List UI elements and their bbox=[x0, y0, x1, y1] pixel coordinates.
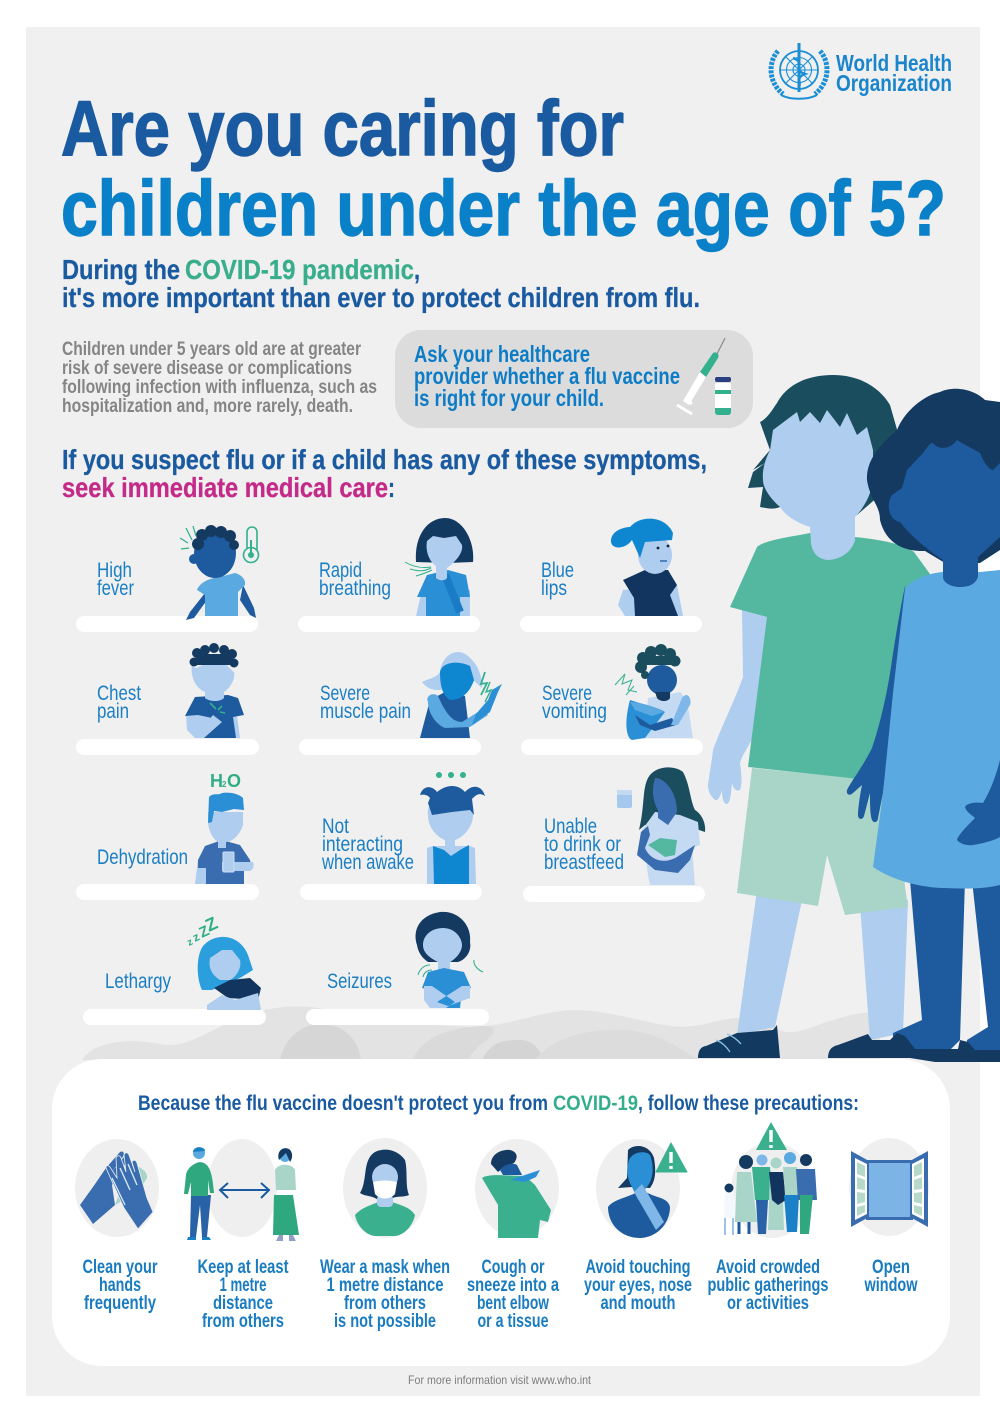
precaution: keep distance: 1 metre bbox=[220, 1275, 266, 1296]
heading: seek medical care: : bbox=[388, 472, 395, 503]
legs bbox=[893, 880, 965, 1050]
back hair bbox=[867, 389, 1000, 563]
WHO logo: Organization bbox=[836, 70, 952, 96]
symptom: chest pain bbox=[76, 643, 259, 755]
right hand bbox=[957, 760, 1000, 845]
dress bbox=[873, 570, 1000, 889]
precaution: wear a mask: is not possible bbox=[334, 1311, 436, 1332]
precaution: avoid crowds: Avoid crowded bbox=[716, 1257, 820, 1278]
icon: H2O text: 2 bbox=[222, 780, 227, 789]
precaution: open window bbox=[849, 1138, 929, 1296]
symptom: not interacting when awake: interacting bbox=[322, 833, 403, 856]
left arm bbox=[847, 586, 908, 822]
precaution: cough into elbow: or a tissue bbox=[478, 1311, 548, 1332]
icon: crowd with warning bbox=[724, 1122, 817, 1238]
legs bbox=[737, 890, 802, 1035]
person 3 bbox=[752, 1167, 772, 1200]
symptom: unable to drink or breastfeed: Unable bbox=[544, 815, 597, 838]
icon: zzz: z bbox=[186, 937, 195, 949]
symptom: seizures bbox=[306, 912, 489, 1025]
precaution: open window: window bbox=[864, 1275, 918, 1296]
symptom: blue lips: lips bbox=[541, 577, 567, 600]
person 4 bbox=[768, 1172, 784, 1230]
symptom: dehydration bbox=[76, 771, 259, 900]
icon: child with water glass bbox=[195, 771, 254, 884]
face and neck bbox=[889, 440, 1000, 587]
callout: ask your healthcare provider: is right for your child. bbox=[414, 385, 604, 411]
icon: open window bbox=[849, 1138, 929, 1236]
symptom: severe vomiting: vomiting bbox=[542, 700, 607, 723]
symptom: severe muscle pain bbox=[299, 652, 502, 755]
precaution: clean your hands: hands bbox=[99, 1275, 141, 1296]
hair bbox=[748, 375, 900, 515]
text block: risk explanation bbox=[62, 339, 377, 417]
precaution: cough into elbow: Cough or bbox=[482, 1257, 545, 1278]
WHO logo bbox=[771, 43, 952, 99]
symptom: rapid breathing bbox=[298, 518, 480, 632]
symptom: unable to drink or breastfeed: breastfeed bbox=[544, 851, 624, 874]
icon: child with muscle pain bbox=[420, 652, 502, 738]
person 5 bbox=[783, 1167, 799, 1195]
symptom: severe vomiting bbox=[521, 644, 703, 755]
heading: seek medical care bbox=[62, 444, 707, 503]
symptom: high fever: High bbox=[97, 559, 132, 582]
symptom: chest pain: Chest bbox=[97, 682, 141, 705]
icon: zzz: Z bbox=[197, 922, 212, 942]
precaution: avoid crowds: or activities bbox=[727, 1293, 809, 1314]
precaution: wear a mask: from others bbox=[344, 1293, 426, 1314]
shorts bbox=[737, 768, 908, 915]
person 6 bbox=[796, 1169, 817, 1200]
WHO logo: World Health bbox=[836, 50, 952, 76]
precautions heading bbox=[138, 1092, 859, 1115]
footer: For more information visit www.who.int bbox=[408, 1373, 592, 1387]
heading: seek medical care: seek immediate medical care bbox=[62, 472, 388, 503]
person 2 bbox=[735, 1172, 757, 1222]
precaution: clean your hands: Clean your bbox=[82, 1257, 158, 1278]
precaution: avoid touching face bbox=[584, 1139, 692, 1314]
precaution: cough into elbow: bent elbow bbox=[477, 1293, 549, 1314]
icon: zzz: z bbox=[190, 929, 202, 945]
symptom: rapid breathing: breathing bbox=[319, 577, 391, 600]
precaution: keep distance: from others bbox=[202, 1311, 284, 1332]
text block: risk explanation: hospitalization and, more rarely, death. bbox=[62, 396, 353, 417]
icon: child with chest pain bbox=[185, 643, 244, 738]
head and neck bbox=[763, 410, 873, 560]
icon: two people with arrow bbox=[184, 1139, 299, 1241]
symptom: dehydration: Dehydration bbox=[97, 846, 188, 869]
precaution: avoid touching face: and mouth bbox=[600, 1293, 676, 1314]
symptom: not interacting when awake bbox=[300, 772, 485, 900]
precaution: wear a mask: 1 metre distance bbox=[326, 1275, 444, 1296]
symptom: unable to drink or breastfeed bbox=[523, 767, 705, 902]
symptom: lethargy: Lethargy bbox=[105, 970, 171, 993]
symptom: not interacting when awake: when awake bbox=[321, 851, 414, 874]
precaution: clean your hands bbox=[75, 1139, 159, 1314]
person 1 bbox=[724, 1190, 737, 1218]
icon: child with three dots bbox=[420, 772, 485, 884]
icon: zzz bbox=[186, 913, 221, 949]
icon: child vomiting into a bowl bbox=[615, 644, 693, 740]
icon: child with seizures bbox=[416, 912, 483, 1008]
precaution: wear a mask: Wear a mask when bbox=[320, 1257, 450, 1278]
icon: sleepy child bbox=[186, 913, 261, 1010]
big child: right bbox=[828, 389, 1000, 1062]
symptom: rapid breathing: Rapid bbox=[319, 559, 362, 582]
arm bbox=[708, 610, 767, 804]
sandals bbox=[828, 1033, 1000, 1062]
subtitle: During the bbox=[62, 254, 180, 285]
precaution: keep distance bbox=[184, 1139, 299, 1332]
precautions heading: COVID-19 bbox=[553, 1092, 638, 1115]
t-shirt bbox=[730, 533, 930, 785]
precaution: avoid touching face: your eyes, nose bbox=[584, 1275, 692, 1296]
icon: person wearing mask bbox=[343, 1138, 427, 1238]
symptom: lethargy bbox=[83, 913, 266, 1025]
white precautions panel bbox=[52, 1059, 950, 1366]
symptom: chest pain: pain bbox=[97, 700, 129, 723]
precaution: keep distance: distance bbox=[213, 1293, 273, 1314]
precaution: wear a mask bbox=[320, 1138, 450, 1332]
symptom: blue lips: Blue bbox=[541, 559, 574, 582]
icon: H2O text bbox=[210, 771, 241, 791]
title: Are you caring for bbox=[61, 84, 624, 172]
icon: child with fever bbox=[180, 525, 258, 620]
text block: risk explanation: following infection with influenza, such as bbox=[62, 377, 377, 398]
symptom: blue lips bbox=[520, 519, 702, 632]
precaution: avoid touching face: Avoid touching bbox=[586, 1257, 690, 1278]
callout: ask your healthcare provider bbox=[395, 330, 753, 428]
precaution: keep distance: Keep at least bbox=[198, 1257, 289, 1278]
symptom: unable to drink or breastfeed: to drink or bbox=[544, 833, 621, 856]
callout: ask your healthcare provider: provider whether a flu vaccine bbox=[414, 363, 680, 389]
symptom: high fever bbox=[76, 525, 258, 632]
icon: H2O text: H bbox=[210, 771, 223, 791]
precaution: clean your hands: frequently bbox=[84, 1293, 156, 1314]
text block: risk explanation: risk of severe disease or complications bbox=[62, 358, 352, 379]
precaution: avoid crowds: public gatherings bbox=[708, 1275, 828, 1296]
icon: person coughing into elbow bbox=[475, 1139, 559, 1238]
icon: H2O text: O bbox=[227, 771, 241, 791]
icon: mother holding baby bbox=[617, 767, 705, 885]
icon: washing hands bbox=[75, 1139, 159, 1237]
subtitle bbox=[62, 254, 700, 313]
symptom: severe muscle pain: Severe bbox=[320, 682, 370, 705]
grey hills behind symptoms bbox=[82, 1006, 880, 1060]
icon: zzz: Z bbox=[202, 913, 221, 936]
shoes bbox=[698, 1025, 780, 1058]
big child: left bbox=[698, 375, 930, 1058]
symptom: not interacting when awake: Not bbox=[322, 815, 349, 838]
icon: child breathing rapidly bbox=[405, 518, 473, 616]
heading: seek medical care: If you suspect flu or if a child has any of these symptoms, bbox=[62, 444, 707, 475]
symptom: severe muscle pain: muscle pain bbox=[320, 700, 411, 723]
subtitle: it's more important than ever to protect children from flu. bbox=[62, 282, 700, 313]
symptom: seizures: Seizures bbox=[327, 970, 392, 993]
precaution: cough into elbow bbox=[467, 1139, 559, 1332]
callout: ask your healthcare provider: Ask your healthcare bbox=[414, 341, 590, 367]
WHO emblem bbox=[771, 43, 827, 99]
subtitle: COVID-19 pandemic bbox=[185, 254, 414, 285]
subtitle: , bbox=[414, 254, 420, 285]
symptom: high fever: fever bbox=[97, 577, 134, 600]
precaution: avoid crowds bbox=[708, 1122, 828, 1314]
title bbox=[61, 84, 946, 252]
precautions heading: , follow these precautions: bbox=[638, 1092, 859, 1115]
precautions heading: Because the flu vaccine doesn't protect you from bbox=[138, 1092, 548, 1115]
icon: person touching face bbox=[596, 1139, 687, 1238]
icon: child with blue lips bbox=[611, 519, 683, 616]
precaution: cough into elbow: sneeze into a bbox=[467, 1275, 559, 1296]
icon: syringe and vial bbox=[677, 338, 731, 415]
text block: risk explanation: Children under 5 years old are at greater bbox=[62, 339, 361, 360]
symptom: severe vomiting: Severe bbox=[542, 682, 592, 705]
precaution: open window: Open bbox=[872, 1257, 910, 1278]
